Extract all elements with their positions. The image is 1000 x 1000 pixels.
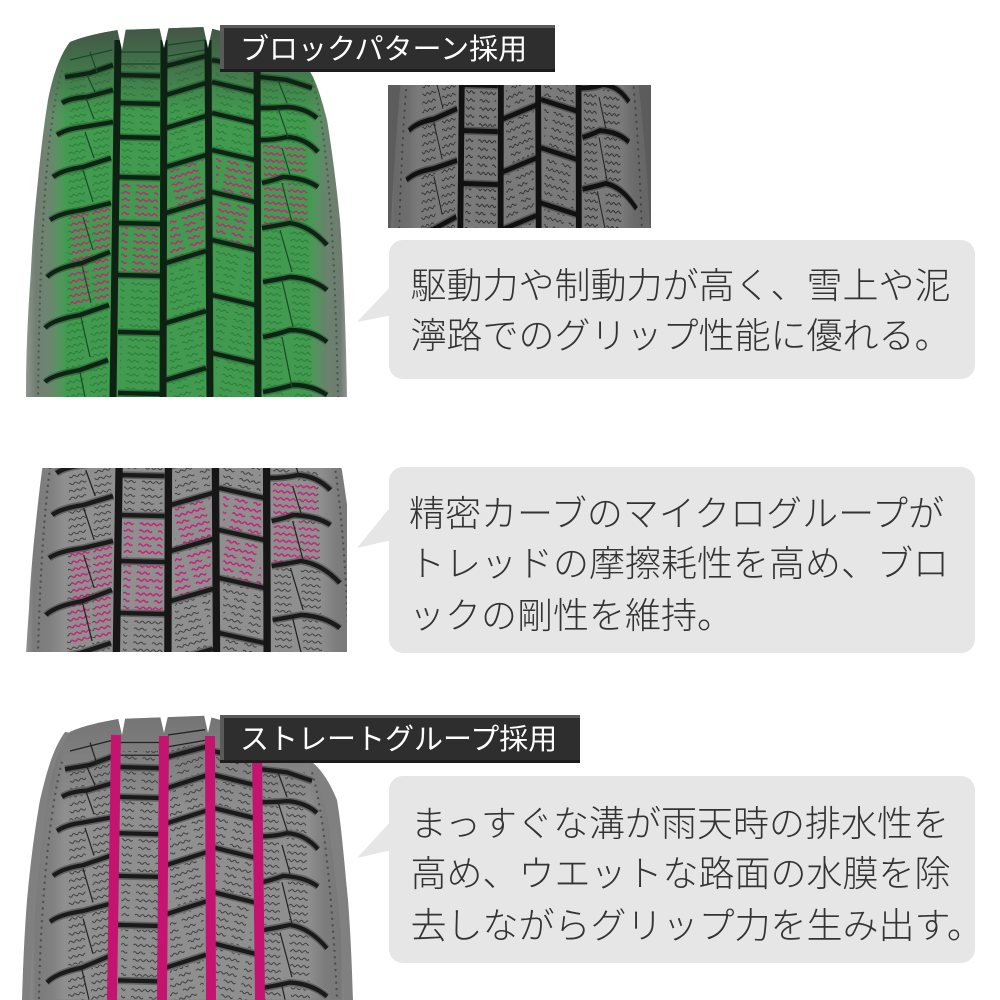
callout: micro groove: トレッドの摩擦耗性を高め、ブロ xyxy=(409,543,949,584)
callout: straight groove: 高め、ウエットな路面の水膜を除 xyxy=(410,853,951,894)
callout: micro groove: 精密カーブのマイクログループが xyxy=(409,493,944,534)
inset tire tread close-up xyxy=(388,85,651,228)
tire photo: micro grooves in pink xyxy=(26,468,347,652)
callout: micro groove xyxy=(357,467,975,653)
callout: micro groove: ックの剛性を維持。 xyxy=(409,595,733,636)
label: block pattern: ブロックパターン採用 xyxy=(240,33,527,66)
label: block pattern xyxy=(220,25,555,72)
tire photo: block pattern highlighted in green xyxy=(26,25,347,397)
tire photo: straight grooves in magenta xyxy=(22,710,353,1000)
callout: block pattern traction xyxy=(357,240,975,379)
label: straight groove: ストレートグループ採用 xyxy=(240,723,557,756)
callout: straight groove xyxy=(357,776,983,963)
callout: straight groove: まっすぐな溝が雨天時の排水性を xyxy=(410,803,949,844)
callout: block pattern traction: 駆動力や制動力が高く、雪上や泥 xyxy=(410,265,951,306)
magenta straight grooves xyxy=(112,735,260,1000)
label: straight groove xyxy=(220,715,580,763)
callout: straight groove: 去しながらグリップ力を生み出す。 xyxy=(410,905,983,946)
callout: block pattern traction: 濘路でのグリップ性能に優れる。 xyxy=(410,315,951,356)
